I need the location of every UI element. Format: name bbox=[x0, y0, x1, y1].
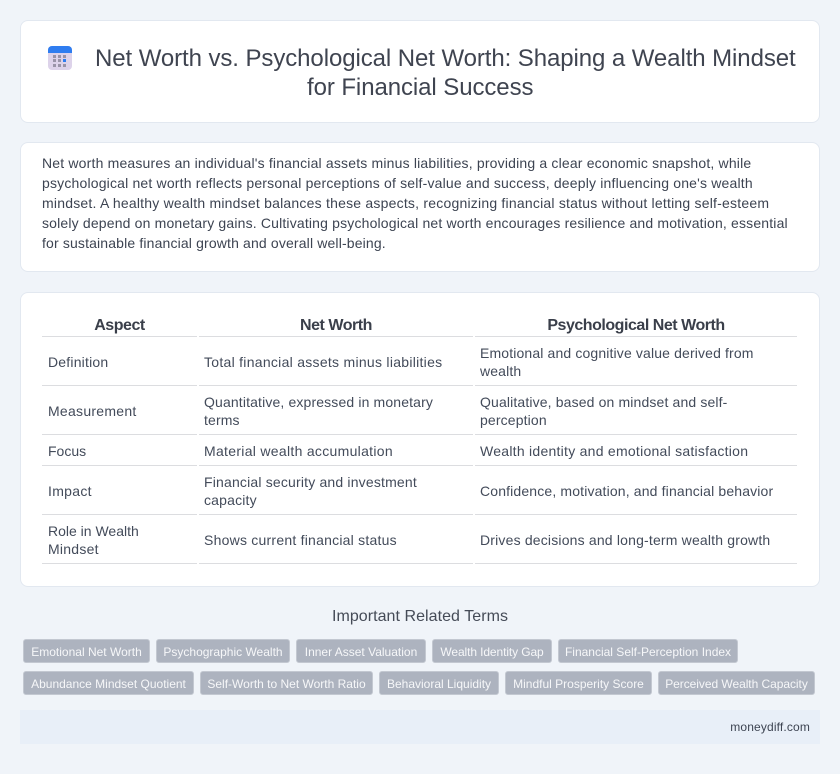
row: focus: Focus bbox=[48, 443, 86, 459]
related term tags: Inner Asset Valuation bbox=[305, 645, 417, 659]
row: definition bbox=[48, 345, 754, 379]
row: role in wealth mindset: Shows current financial status bbox=[204, 532, 397, 548]
table header: Net Worth bbox=[300, 317, 372, 334]
row: impact: Impact bbox=[48, 483, 92, 499]
table header: Aspect bbox=[94, 317, 145, 334]
row: role in wealth mindset bbox=[48, 523, 770, 557]
icon: calendar bbox=[48, 46, 72, 70]
row: impact: Confidence, motivation, and financial behavior bbox=[480, 483, 773, 499]
panel: summary card bbox=[20, 142, 820, 272]
related term tags: Perceived Wealth Capacity bbox=[665, 677, 808, 691]
title: Net Worth vs. Psychological Net Worth: Shaping a Wealth Mindset bbox=[95, 45, 796, 72]
row: definition: Definition bbox=[48, 354, 108, 370]
row: impact bbox=[48, 474, 773, 508]
panel: comparison table card bbox=[20, 292, 820, 587]
row: definition: Emotional and cognitive value derived from bbox=[480, 345, 754, 361]
related term tags: Wealth Identity Gap bbox=[440, 645, 544, 659]
row: measurement: Qualitative, based on mindset and self- bbox=[480, 394, 728, 410]
summary text: mindset. A healthy wealth mindset balances these aspects, recognizing financial status without letting self-esteem bbox=[42, 195, 769, 211]
heading: important related terms: Important Related Terms bbox=[332, 608, 508, 625]
footer bar bbox=[20, 710, 820, 744]
table header bbox=[94, 317, 725, 334]
title: for Financial Success bbox=[307, 74, 533, 101]
row: measurement: terms bbox=[204, 412, 240, 428]
row: focus: Wealth identity and emotional satisfaction bbox=[480, 443, 748, 459]
row: measurement bbox=[48, 394, 728, 428]
related term tags: Emotional Net Worth bbox=[31, 645, 142, 659]
row: impact: Financial security and investment bbox=[204, 474, 417, 490]
summary text: solely depend on monetary gains. Cultivating psychological net worth encourages resilience and motivation, essential bbox=[42, 215, 788, 231]
summary text: for sustainable financial growth and overall well-being. bbox=[42, 235, 386, 251]
row: measurement: Measurement bbox=[48, 403, 137, 419]
row: role in wealth mindset: Drives decisions and long-term wealth growth bbox=[480, 532, 770, 548]
row: role in wealth mindset: Mindset bbox=[48, 541, 99, 557]
related term tags bbox=[23, 639, 815, 695]
row: definition: wealth bbox=[480, 363, 521, 379]
related term tags: Psychographic Wealth bbox=[163, 645, 283, 659]
row: measurement: Quantitative, expressed in monetary bbox=[204, 394, 433, 410]
row: focus: Material wealth accumulation bbox=[204, 443, 393, 459]
comparison table bbox=[42, 317, 797, 564]
related term tags: Behavioral Liquidity bbox=[387, 677, 491, 691]
row: role in wealth mindset: Role in Wealth bbox=[48, 523, 139, 539]
related term tags: Mindful Prosperity Score bbox=[513, 677, 644, 691]
row: definition: Total financial assets minus liabilities bbox=[204, 354, 442, 370]
table header: Psychological Net Worth bbox=[547, 317, 725, 334]
panel: title card bbox=[20, 20, 820, 123]
summary text: Net worth measures an individual's financial assets minus liabilities, providing a clear economic snapshot, while bbox=[42, 155, 751, 171]
title bbox=[95, 45, 796, 101]
related term tags: Self-Worth to Net Worth Ratio bbox=[207, 677, 366, 691]
summary text bbox=[42, 155, 788, 251]
row: impact: capacity bbox=[204, 492, 257, 508]
row: measurement: perception bbox=[480, 412, 547, 428]
footer brand: moneydiff.com bbox=[730, 720, 810, 734]
related term tags: Financial Self-Perception Index bbox=[565, 645, 731, 659]
related term tags: Abundance Mindset Quotient bbox=[31, 677, 186, 691]
summary text: psychological net worth reflects personal perceptions of self-value and success, deeply influencing one's wealth bbox=[42, 175, 753, 191]
row: focus bbox=[48, 443, 748, 459]
